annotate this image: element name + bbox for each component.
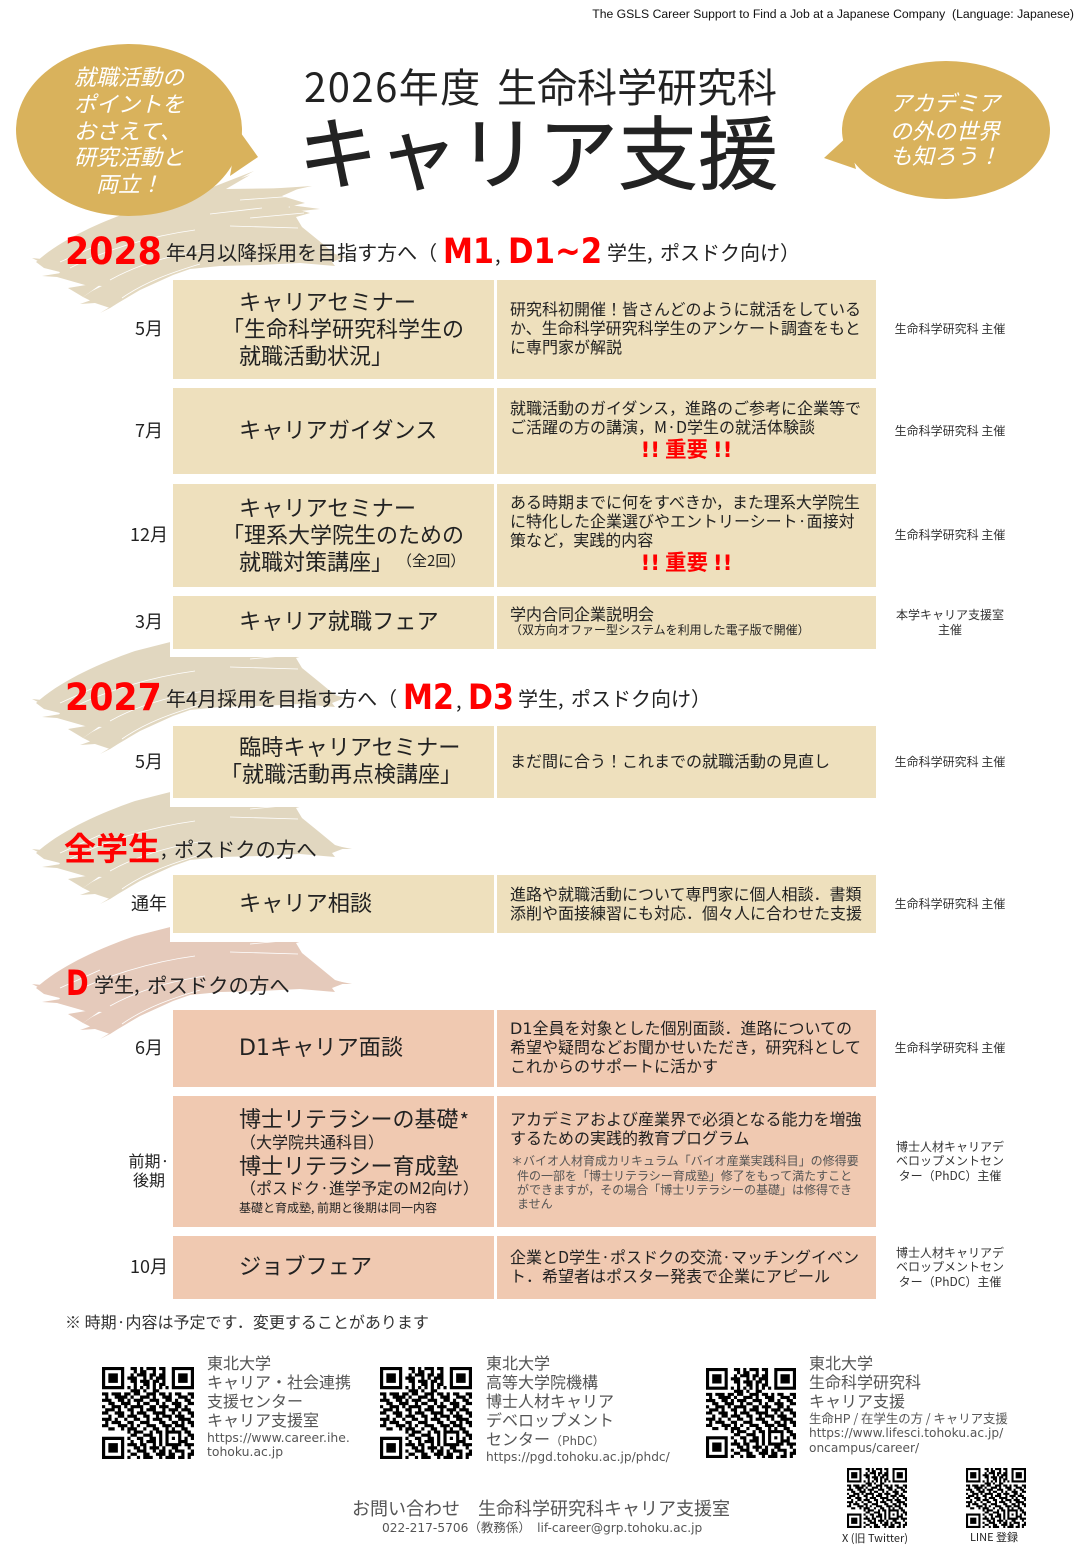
organizer: 生命科学研究科 主催 [895, 422, 1005, 439]
top-right English note: The GSLS Career Support to Find a Job at a Japanese Company (Language: Japanese) [592, 7, 1074, 21]
QR code: X [842, 1468, 908, 1546]
speech bubble: right [824, 61, 1050, 199]
heading: 2027: M2 [403, 678, 454, 718]
row: June D1 interview [135, 1010, 1005, 1087]
month: 6月 [135, 1034, 163, 1060]
organizer [896, 606, 1004, 638]
QR code: LINE: LINE 登録 [970, 1529, 1018, 1545]
contact text: キャリア・社会連携 [207, 1369, 351, 1393]
event name [173, 726, 494, 798]
contact text: oncampus/career/ [809, 1441, 919, 1455]
organizer: 主催 [938, 620, 962, 638]
contact block: life sciences [706, 1350, 1008, 1458]
organizer [896, 1138, 1004, 1184]
contact block: career center [102, 1350, 351, 1459]
title: 2026年度 [304, 56, 482, 114]
contact text: 博士人材キャリア [486, 1388, 614, 1412]
contact text [486, 1350, 670, 1464]
month: 3月 [135, 608, 163, 634]
event name: （全2回） [397, 550, 465, 571]
contact text [207, 1350, 351, 1459]
heading: 2027: D3 [468, 678, 514, 718]
description: これからのサポートに活かす [510, 1053, 718, 1077]
brush: 2028 section [32, 171, 352, 313]
description: ません [517, 1195, 553, 1212]
contact text: 高等大学院機構 [486, 1369, 598, 1393]
description: D1全員を対象とした個別面談．進路についての [510, 1015, 852, 1039]
contact block: PhDC [380, 1350, 670, 1464]
heading: 2028: , [495, 239, 501, 268]
event name: キャリアセミナー [239, 491, 416, 523]
description [497, 280, 876, 379]
QR code: X: X (旧 Twitter) [842, 1530, 908, 1546]
contact text: 東北大学 [207, 1350, 271, 1374]
speech bubble: right: アカデミア [890, 86, 1000, 118]
row: March fair [135, 596, 1004, 649]
heading: all students: 全学生 [64, 830, 160, 868]
description: 就職活動のガイダンス，進路のご参考に企業等で [510, 395, 861, 419]
event name [173, 280, 494, 379]
footnote: ※ 時期·内容は予定です．変更することがあります [65, 1309, 429, 1333]
description: （双方向オファー型システムを利用した電子版で開催） [510, 621, 810, 638]
organizer: 生命科学研究科 主催 [895, 1039, 1005, 1056]
speech bubble: left: ポイントを [74, 87, 184, 119]
description: か、生命科学研究科学生のアンケート調査をもと [510, 315, 861, 339]
event name: （ポスドク·進学予定のM2向け） [240, 1175, 479, 1199]
description: アカデミアおよび産業界で必須となる能力を増強 [510, 1106, 862, 1130]
event name [173, 1096, 494, 1227]
inquiry contact: お問い合わせ 生命科学研究科キャリア支援室 [352, 1495, 730, 1521]
organizer: 生命科学研究科 主催 [895, 895, 1005, 912]
speech bubble: right: も知ろう！ [890, 139, 1000, 171]
event name: （大学院共通科目） [240, 1129, 384, 1153]
event name: 博士リテラシー育成塾 [239, 1149, 459, 1181]
speech bubble: right: の外の世界 [890, 114, 1000, 146]
heading: 2028: ポスドク向け） [660, 237, 800, 266]
heading: 2027: 年4月採用を目指す方へ（ [166, 683, 397, 712]
description: 希望や疑問などお聞かせいただき，研究科として [510, 1034, 861, 1058]
event name [173, 388, 494, 474]
brush: all students section [32, 762, 352, 904]
contact text: デベロップメント [486, 1407, 614, 1431]
description [497, 726, 876, 798]
organizer: 生命科学研究科 主催 [895, 320, 1005, 337]
heading: 2027: 2027 [65, 676, 162, 719]
heading: 2028: 年4月以降採用を目指す方へ（ [166, 237, 437, 266]
event name: 就職活動状況」 [239, 339, 393, 371]
speech bubble: left: 就職活動の [74, 60, 184, 92]
row: July guidance [135, 388, 1005, 474]
QR code: LINE [966, 1468, 1026, 1545]
contact text: 生命HP / 在学生の方 / キャリア支援 [809, 1409, 1008, 1427]
heading: 2027 [65, 676, 711, 719]
month: 5月 [135, 748, 163, 774]
event name: 「理系大学院生のための [222, 518, 464, 550]
description: 学内合同企業説明会 [510, 601, 654, 625]
description: !! 重要 !! [640, 546, 732, 577]
description: 件の一部を「博士リテラシー育成塾」修了をもって満たすこと [517, 1167, 852, 1184]
description: ある時期までに何をすべきか，また理系大学院生 [510, 489, 860, 513]
row: December seminar [130, 484, 1005, 587]
organizer: 生命科学研究科 主催 [895, 753, 1005, 770]
description: するための実践的教育プログラム [510, 1125, 750, 1149]
event name: D1キャリア面談 [239, 1030, 403, 1062]
speech bubble: left: おさえて、 [74, 114, 182, 146]
description: 研究科初開催！皆さんどのように就活をしている [510, 296, 861, 320]
heading: all students: ポスドクの方へ [174, 833, 317, 863]
QR code [706, 1368, 796, 1458]
description: まだ間に合う！これまでの就職活動の見直し [510, 748, 830, 772]
description: ト．希望者はポスター発表で企業にアピール [510, 1263, 830, 1287]
event name: キャリアセミナー [239, 285, 416, 317]
month: 7月 [135, 416, 163, 442]
heading: all students: , [161, 833, 167, 862]
contact text: キャリア支援室 [207, 1407, 319, 1431]
contact text: https://www.career.ihe. [207, 1430, 350, 1445]
title: 生命科学研究科 [497, 56, 777, 114]
heading: 2028 [65, 230, 800, 273]
row: May extra seminar [135, 726, 1005, 798]
event name [173, 1236, 494, 1299]
heading: D students [66, 964, 290, 1004]
heading: all students [64, 830, 317, 868]
month: 5月 [135, 315, 163, 341]
event name: 博士リテラシーの基礎* [239, 1102, 469, 1134]
description: !! 重要 !! [640, 433, 732, 464]
month: 10月 [130, 1253, 168, 1279]
description [497, 1096, 876, 1227]
event name: 就職対策講座」 [239, 545, 393, 577]
inquiry contact [352, 1495, 730, 1536]
contact text [809, 1350, 1008, 1455]
heading: 2027: 学生, [518, 683, 564, 712]
event name: 「生命科学研究科学生の [222, 312, 464, 344]
speech bubble: left [16, 44, 258, 216]
event name [173, 875, 494, 933]
description: 策など，実践的内容 [510, 527, 653, 551]
description [497, 1010, 876, 1087]
row: May seminar [135, 280, 1005, 379]
heading: D students: 学生, [94, 969, 140, 998]
row: year-round consultation [131, 875, 1005, 933]
brush: 2027 section [32, 612, 352, 754]
event name: キャリアガイダンス [239, 413, 437, 445]
organizer: 博士人材キャリアデ [896, 1244, 1004, 1261]
period: 前期· [128, 1148, 169, 1172]
contact text: tohoku.ac.jp [207, 1444, 283, 1459]
description: ができますが，その場合「博士リテラシーの基礎」は修得でき [517, 1181, 852, 1198]
row: doctoral literacy [128, 1096, 1004, 1227]
description: 添削や面接練習にも対応．個々人に合わせた支援 [510, 900, 862, 924]
period: 後期 [133, 1166, 165, 1190]
event name: 臨時キャリアセミナー [239, 730, 460, 762]
event name [173, 1010, 494, 1087]
description: ＊バイオ人材育成カリキュラム「バイオ産業実践科目」の修得要 [511, 1152, 859, 1169]
organizer: 博士人材キャリアデ [896, 1138, 1004, 1155]
contact text: https://pgd.tohoku.ac.jp/phdc/ [486, 1450, 670, 1464]
heading: 2027: , [456, 685, 462, 714]
contact text: https://www.lifesci.tohoku.ac.jp/ [809, 1426, 1003, 1440]
event name: 基礎と育成塾, 前期と後期は同一内容 [239, 1199, 437, 1216]
QR code [102, 1367, 194, 1459]
event name: キャリア就職フェア [239, 604, 439, 636]
heading: 2027: ポスドク向け） [571, 683, 711, 712]
description [497, 875, 876, 933]
event name [173, 484, 494, 587]
heading: 2028: M1 [443, 232, 494, 272]
period [128, 1148, 169, 1190]
organizer: 本学キャリア支援室 [896, 606, 1004, 623]
description: に専門家が解説 [510, 334, 622, 358]
speech bubble: left: 両立！ [96, 167, 162, 199]
description [497, 388, 876, 474]
QR code [380, 1367, 472, 1459]
description: ご活躍の方の講演，M·D学生の就活体験談 [510, 414, 815, 438]
speech bubble: left: 研究活動と [74, 140, 184, 172]
organizer: 生命科学研究科 主催 [895, 526, 1005, 543]
heading: D students: ポスドクの方へ [147, 969, 290, 999]
description: 進路や就職活動について専門家に個人相談．書類 [510, 881, 862, 905]
row: job fair [130, 1236, 1004, 1299]
description [497, 1236, 876, 1299]
description: に特化した企業選びやエントリーシート·面接対 [510, 508, 855, 532]
description [497, 484, 876, 587]
brush: D students section [32, 897, 352, 1039]
organizer: ター（PhDC）主催 [899, 1167, 1001, 1184]
heading: 2028: D1~2 [508, 232, 602, 272]
contact text: センター（PhDC） [486, 1426, 605, 1450]
contact text: 東北大学 [486, 1350, 550, 1374]
organizer: ター（PhDC）主催 [899, 1273, 1001, 1290]
heading: 2028: 学生, [607, 237, 653, 266]
month: 12月 [130, 521, 168, 547]
organizer: ベロップメントセン [896, 1152, 1004, 1169]
description [497, 596, 876, 649]
inquiry contact: 022-217-5706（教務係） lif-career@grp.tohoku.ac.jp [382, 1517, 702, 1536]
event name: キャリア相談 [239, 886, 372, 918]
contact text: 支援センター [207, 1388, 303, 1412]
event name: ジョブフェア [239, 1249, 372, 1281]
period: 通年 [131, 890, 167, 916]
event name: 「就職活動再点検講座」 [220, 757, 462, 789]
organizer [896, 1244, 1004, 1290]
heading: D students: D [66, 964, 89, 1004]
contact text: キャリア支援 [809, 1388, 905, 1412]
contact text: 生命科学研究科 [809, 1369, 921, 1393]
contact text: 東北大学 [809, 1350, 873, 1374]
title: キャリア支援 [298, 91, 778, 207]
heading: 2028: 2028 [65, 230, 162, 273]
organizer: ベロップメントセン [896, 1258, 1004, 1275]
event name [173, 596, 494, 649]
description: 企業とD学生·ポスドクの交流·マッチングイベン [510, 1244, 859, 1268]
